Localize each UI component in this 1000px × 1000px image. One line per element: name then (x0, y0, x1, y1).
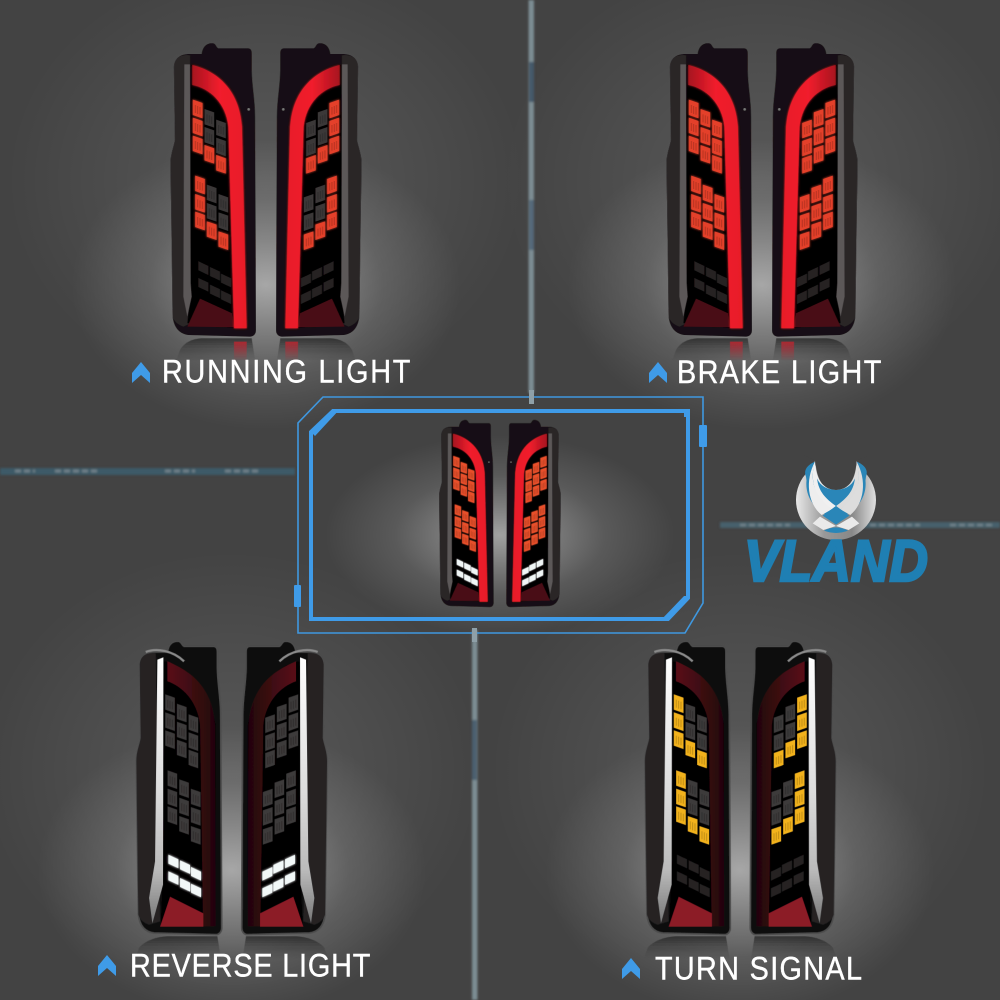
turn signal text: TURN SIGNAL (655, 951, 862, 987)
reverse light text: REVERSE LIGHT (130, 948, 370, 984)
frame corner accents (310, 409, 690, 621)
label: brake light (649, 355, 881, 390)
panel: running light lamps (171, 43, 361, 360)
icon: chevron (622, 958, 640, 979)
logo wordmark: VLAND (744, 529, 928, 594)
logo emblem (796, 455, 876, 540)
frame tab left (294, 585, 301, 607)
centre right lamp (506, 420, 561, 607)
panel: turn signal lamps (644, 641, 836, 958)
frame stub top (529, 390, 534, 404)
turn signal reflection (644, 936, 836, 958)
panel: reverse light lamps (136, 641, 328, 958)
VLAND logo (744, 455, 928, 594)
inner thick frame (311, 411, 688, 619)
label: running light (132, 354, 410, 390)
brake light text: BRAKE LIGHT (677, 355, 881, 390)
brake light left lamp (667, 43, 752, 337)
label: reverse light (98, 948, 370, 984)
frame stub bottom (472, 628, 477, 642)
brake light right lamp (772, 43, 857, 337)
reverse light reflection (136, 936, 328, 958)
reverse light left lamp (136, 641, 222, 935)
reverse light right lamp (242, 641, 327, 935)
running light left lamp (171, 43, 256, 337)
centre left lamp (439, 420, 494, 607)
panel: centre lamps (439, 420, 561, 607)
icon: chevron (132, 362, 150, 383)
brake light reflection (673, 338, 851, 360)
running light reflection (177, 338, 355, 360)
frame tab right (699, 425, 707, 447)
turn signal right lamp (750, 641, 836, 935)
running light text: RUNNING LIGHT (162, 354, 410, 390)
label: turn signal (622, 951, 862, 987)
panel: centre frame (294, 390, 707, 642)
running light right lamp (276, 43, 361, 337)
turn signal left lamp (645, 641, 730, 935)
panel: brake light lamps (667, 43, 857, 360)
icon: chevron (98, 955, 116, 976)
icon: chevron (649, 362, 667, 383)
outer thin frame (298, 397, 703, 633)
